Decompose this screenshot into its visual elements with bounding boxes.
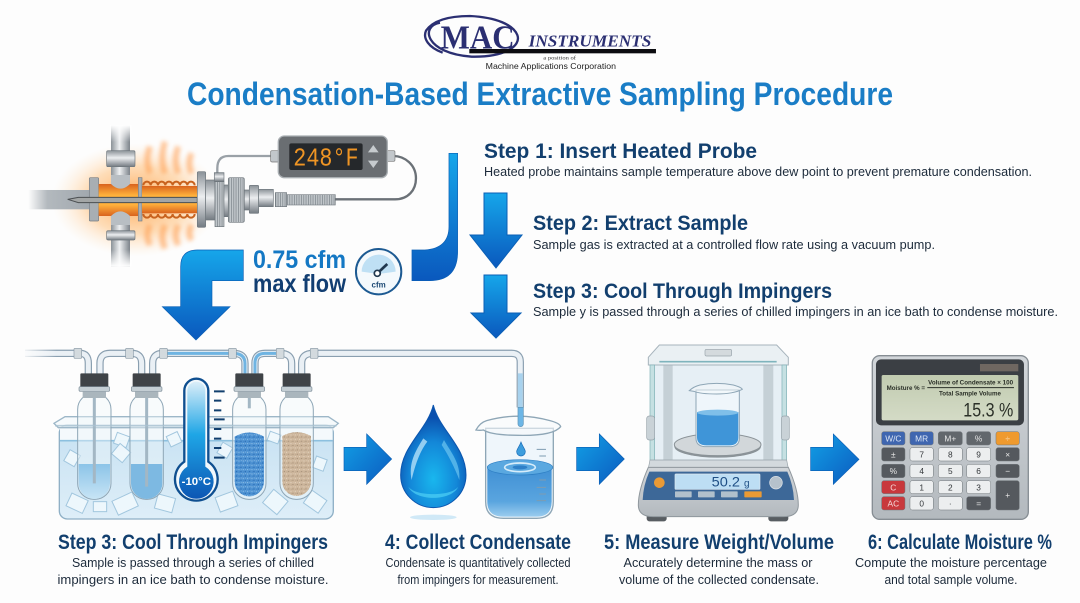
ice cubes <box>64 431 327 515</box>
illustration: heated probe and temperature controller <box>28 125 416 267</box>
connecting tubes <box>20 347 520 407</box>
rim highlight over bottles <box>55 423 337 428</box>
caption: collect condensate: 4: Collect Condensate <box>385 531 571 554</box>
arrow: step 2 to step 3 <box>471 275 521 338</box>
caption: cool through impingers: impingers in an ice bath to condense moisture. <box>58 573 328 587</box>
calculator keypad: ÷ <box>1005 433 1010 443</box>
step 3 text <box>533 280 1058 319</box>
arrow: condensate to balance <box>577 434 624 484</box>
icon: flow gauge: cfm <box>372 280 386 289</box>
caption: cool through impingers <box>58 531 328 587</box>
step 3 text: Step 3: Cool Through Impingers <box>533 280 832 303</box>
step 3 text: Sample y is passed through a series of chilled impingers in an ice bath to condense moisture. <box>533 305 1058 319</box>
calculator keypad: W/C <box>885 433 901 443</box>
probe body <box>68 172 335 227</box>
calculator keypad: % <box>890 466 898 476</box>
step 2 text <box>533 212 935 252</box>
caption: collect condensate: from impingers for measurement. <box>398 573 558 587</box>
logo: MAC Instruments: Machine Applications Corporation <box>486 61 616 71</box>
caption: cool through impingers: Sample is passed through a series of chilled <box>72 556 314 570</box>
icon: water drop <box>401 405 466 520</box>
calculator keypad: 9 <box>976 449 981 459</box>
calculator keypad: + <box>1005 490 1010 500</box>
calculator keypad: 7 <box>919 449 924 459</box>
logo: MAC Instruments <box>425 16 656 71</box>
logo: MAC Instruments: INSTRUMENTS <box>528 32 651 51</box>
calculator display: Total Sample Volume <box>939 390 1001 397</box>
temperature display: 248°F <box>293 144 359 174</box>
calculator keypad: 5 <box>948 466 953 476</box>
illustration: analytical balance <box>638 345 798 521</box>
calculator keypad: C <box>890 482 896 492</box>
arrow: balance to calculator <box>811 434 859 484</box>
caption: calculate moisture <box>855 531 1052 587</box>
illustration: calculator <box>872 356 1028 519</box>
flow rate label <box>253 246 346 298</box>
calculator display: Moisture % = <box>887 385 925 392</box>
arrow: probe to impingers <box>162 250 243 340</box>
balance base: g <box>744 479 750 490</box>
impinger 2 <box>130 373 163 499</box>
caption: calculate moisture: and total sample volume. <box>884 573 1018 587</box>
caption: measure weight or volume: volume of the collected condensate. <box>619 573 819 587</box>
calculator keypad: 4 <box>919 466 924 476</box>
glass draft shield <box>647 345 789 462</box>
arrow: impingers to condensate <box>344 434 392 484</box>
calculator keypad: 6 <box>976 466 981 476</box>
pan and beaker <box>674 383 761 458</box>
caption: measure weight or volume: Accurately determine the mass or <box>624 556 812 570</box>
caption: calculate moisture: Compute the moisture percentage <box>855 556 1047 570</box>
step 1 text <box>484 140 1032 179</box>
ice bath <box>54 417 338 519</box>
calculator keypad: 8 <box>948 449 953 459</box>
cables <box>217 156 416 199</box>
step 1 text: Heated probe maintains sample temperature above dew point to prevent premature condensation. <box>484 165 1032 179</box>
calculator display: 15.3 % <box>963 401 1013 422</box>
illustration: impingers in ice bath <box>20 347 520 519</box>
calculator keypad: · <box>949 498 952 508</box>
calculator keypad: AC <box>888 498 899 508</box>
flow rate label: 0.75 cfm <box>253 246 346 274</box>
calculator keypad: = <box>976 498 981 508</box>
calculator keypad: M+ <box>944 433 956 443</box>
heat waves <box>147 142 192 248</box>
calculator keypad <box>882 432 1019 510</box>
calculator keypad: ± <box>891 449 896 459</box>
title: Condensation-Based Extractive Sampling Procedure <box>187 76 893 112</box>
calculator keypad: 1 <box>919 482 924 492</box>
impinger 1 <box>78 373 111 499</box>
balance base: 50.2 <box>712 474 740 490</box>
illustration: beaker collecting condensate <box>476 407 561 518</box>
step 2 text: Step 2: Extract Sample <box>533 212 748 235</box>
calculator keypad: − <box>1005 466 1010 476</box>
arrow: step 1 to step 2 <box>470 193 522 268</box>
calculator keypad: 0 <box>919 498 924 508</box>
caption: measure weight or volume <box>604 531 834 587</box>
caption: measure weight or volume: 5: Measure Weight/Volume <box>604 531 834 554</box>
caption: cool through impingers: Step 3: Cool Through Impingers <box>58 531 328 554</box>
step 1 text: Step 1: Insert Heated Probe <box>484 140 757 163</box>
calculator keypad: 2 <box>948 482 953 492</box>
logo: MAC Instruments: MAC <box>441 20 515 57</box>
impinger 4: tan desiccant <box>280 373 313 499</box>
thermometer: -10°C <box>182 476 211 488</box>
calculator display <box>882 375 1018 422</box>
temperature display <box>278 136 387 178</box>
flow rate label: max flow <box>253 270 346 298</box>
calculator keypad: 3 <box>976 482 981 492</box>
calculator keypad: MR <box>915 433 928 443</box>
balance base <box>638 460 798 521</box>
logo: MAC Instruments: a position of <box>543 54 576 61</box>
arrow: curved from step 1 <box>412 153 458 281</box>
step 2 text: Sample gas is extracted at a controlled flow rate using a vacuum pump. <box>533 238 935 252</box>
calculator keypad: × <box>1005 449 1010 459</box>
impinger 3: blue desiccant <box>233 373 266 499</box>
calculator keypad: % <box>975 433 983 443</box>
process pipes <box>28 125 135 267</box>
icon: flow gauge <box>356 249 401 294</box>
caption: collect condensate: Condensate is quantitatively collected <box>386 556 571 570</box>
caption: collect condensate <box>385 531 571 587</box>
calculator display: Volume of Condensate × 100 <box>928 380 1013 387</box>
thermometer <box>175 379 225 501</box>
